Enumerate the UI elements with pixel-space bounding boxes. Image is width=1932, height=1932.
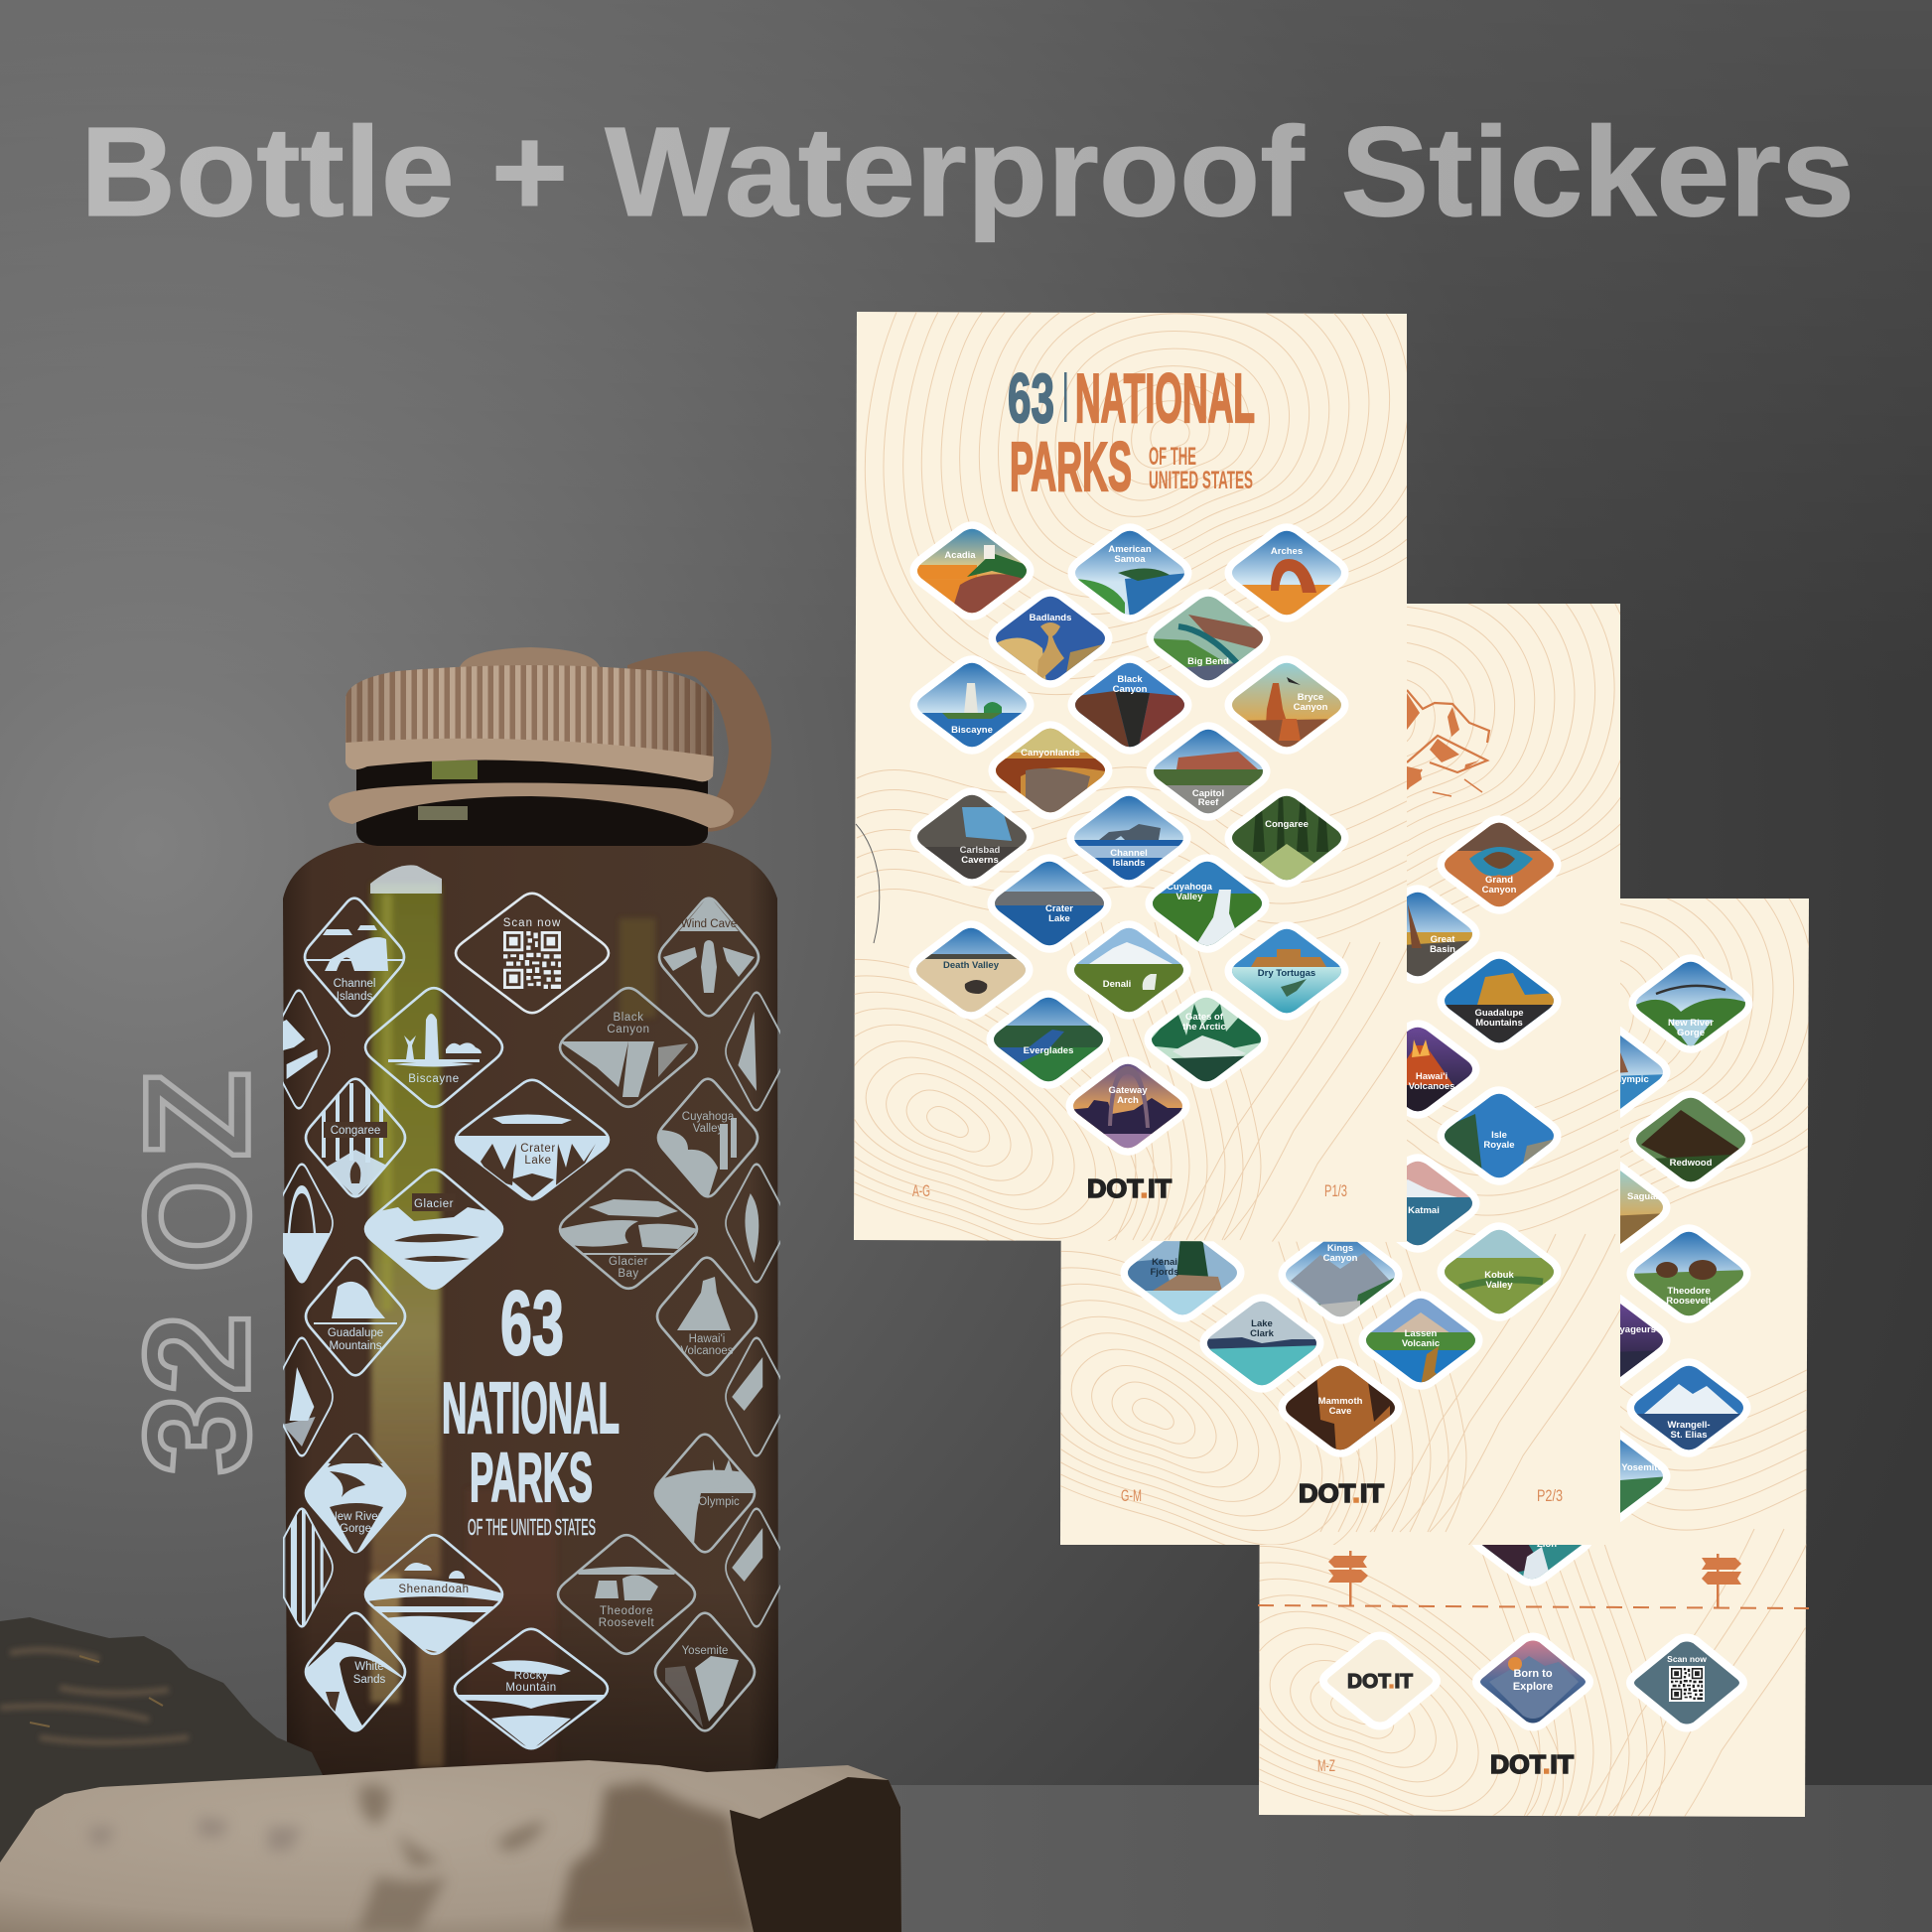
signpost left (1328, 1551, 1368, 1605)
sticker: Carlsbad Caverns (911, 791, 1033, 883)
sticker: Lassen Volcanic: Volcanic (1402, 1338, 1440, 1349)
sticker: Kenai Fjords (1122, 1227, 1243, 1318)
New River Gorge: New River (329, 1511, 382, 1523)
bottle: NATIONAL (442, 1369, 620, 1449)
Rocky Mountain: Rocky (514, 1670, 548, 1682)
sticker: DOT.IT logo: DOT.IT (1347, 1671, 1413, 1693)
Wind Cave: Wind Cave (681, 918, 737, 930)
Hot Springs partial (283, 1336, 334, 1457)
sticker: Badlands: Badlands (1030, 613, 1071, 623)
sheet title: 63 National Parks of the United States: UNITED STATES (1149, 467, 1253, 494)
White Sands (303, 1613, 408, 1733)
sticker: Hawai'i Volcanoes: Volcanoes (1409, 1081, 1454, 1092)
sticker: Scan now QR: Scan now (1667, 1654, 1707, 1664)
Theodore Roosevelt: Theodore (600, 1605, 653, 1617)
neck (356, 745, 708, 846)
sticker: Grand Canyon: Canyon (1482, 885, 1517, 896)
sticker: Hawai'i Volcanoes: Hawai'i (1416, 1071, 1448, 1082)
sticker: Gateway Arch: Arch (1117, 1095, 1139, 1106)
Crater Lake: Lake (524, 1155, 552, 1167)
sticker: Redwood: Redwood (1670, 1158, 1713, 1169)
sticker: Kings Canyon (1280, 1229, 1401, 1320)
sticker: Arches: Arches (1271, 546, 1303, 557)
bottle center text: 63 National Parks (442, 1273, 620, 1540)
Congaree (306, 1079, 405, 1197)
Channel Islands: Islands (337, 991, 372, 1003)
bottle body (283, 843, 778, 1779)
Olympic: Olympic (698, 1496, 740, 1508)
sticker: Isle Royale: Isle (1491, 1130, 1507, 1141)
bottle (268, 647, 787, 1781)
signpost right (1702, 1554, 1741, 1608)
sticker: Lassen Volcanic: Lassen (1405, 1328, 1438, 1339)
bottle center text: 63 National Parks: 63 (500, 1273, 564, 1374)
sticker: New River Gorge: New River (1668, 1018, 1714, 1029)
Biscayne: Biscayne (408, 1073, 460, 1085)
sheet title: 63 National Parks of the United States: NATIONAL (1075, 359, 1255, 437)
Cuyahoga Valley: Valley (693, 1123, 723, 1135)
sticker: Grand Canyon (1439, 819, 1560, 910)
sticker: Great Basin: Basin (1430, 944, 1455, 955)
sticker: Theodore Roosevelt: Roosevelt (1666, 1296, 1713, 1307)
Channel Islands (305, 898, 404, 1016)
sticker: Bryce Canyon (1226, 659, 1347, 751)
sticker: Mammoth Cave: Cave (1329, 1406, 1351, 1417)
sticker: Yosemite: Yosemite (1621, 1462, 1663, 1473)
sticker: Kenai Fjords: Kenai (1152, 1257, 1177, 1268)
mountain illustration (1407, 690, 1489, 796)
Crater Lake: Crater (520, 1143, 556, 1155)
label: P2/3: P2/3 (1537, 1486, 1563, 1505)
sticker: Congaree (1226, 792, 1347, 884)
sticker: Kenai Fjords: Fjords (1150, 1267, 1179, 1278)
sticker: Dry Tortugas: Dry Tortugas (1258, 968, 1315, 979)
bottle center text: 63 National Parks: OF THE UNITED STATES (468, 1514, 596, 1540)
rock: front (0, 1760, 901, 1932)
sticker: Mammoth Cave: Mammoth (1318, 1396, 1363, 1407)
Redwood partial (283, 1507, 334, 1628)
sticker: Channel Islands (1068, 792, 1189, 884)
sticker: Olympic (1620, 1027, 1670, 1118)
cap top knob (460, 647, 600, 667)
sticker: Arches (1226, 527, 1347, 619)
Guadalupe Mountains (306, 1258, 405, 1375)
sticker: Yosemite (1548, 1431, 1669, 1522)
sticker: Big Bend: Big Bend (1187, 656, 1229, 667)
sticker: Zion: Zion (1537, 1539, 1557, 1550)
sticker: New River Gorge (1630, 958, 1751, 1049)
White Sands: White (354, 1661, 384, 1673)
sticker: Acadia: Acadia (944, 550, 976, 561)
sticker: Guadalupe Mountains (1439, 955, 1560, 1046)
sticker: Wrangell-St. Elias: St. Elias (1671, 1430, 1707, 1441)
sticker: Everglades (988, 994, 1109, 1085)
glass reflection (370, 884, 655, 1767)
label: G-M: G-M (1121, 1486, 1142, 1505)
Theodore Roosevelt (558, 1535, 695, 1654)
sticker: Gates of the Arctic (1146, 994, 1267, 1085)
right edge partial diamonds (726, 993, 787, 1626)
sticker: Kobuk Valley: Kobuk (1484, 1270, 1514, 1281)
sticker: Gateway Arch (1067, 1060, 1188, 1152)
sticker: Capitol Reef: Reef (1198, 797, 1219, 808)
Big Bend partial (283, 989, 331, 1110)
sticker sheet 3: M-Z (1107, 744, 1892, 1932)
Crater Lake (449, 1080, 616, 1203)
sticker: Canyonlands (990, 725, 1111, 816)
sticker: Katmai (1357, 1158, 1478, 1249)
sticker: Scan now QR (1630, 1638, 1743, 1727)
Wind Cave (659, 896, 759, 1016)
sticker: Saguaro (1620, 1162, 1670, 1253)
Yosemite (655, 1613, 755, 1730)
sticker: Mammoth Cave (1280, 1362, 1401, 1453)
Shenandoah (361, 1535, 506, 1656)
Scan now QR diamond: Scan now (503, 917, 561, 929)
bottle strap loop (627, 651, 771, 832)
sticker: Black Canyon: Black (1117, 674, 1143, 685)
Biscayne (365, 988, 502, 1107)
Scan now QR diamond (456, 894, 609, 1013)
sticker: Gates of the Arctic: Gates of (1185, 1012, 1224, 1023)
thin map line (856, 824, 880, 943)
sticker: Channel Islands: Islands (1113, 858, 1145, 869)
Rocky Mountain: Mountain (505, 1682, 557, 1694)
right side diamonds (558, 896, 787, 1730)
New River Gorge: Gorge (340, 1523, 371, 1535)
sticker: Channel Islands: Channel (1110, 848, 1148, 859)
sticker: Capitol Reef: Capitol (1192, 788, 1224, 799)
Guadalupe Mountains: Mountains (329, 1340, 382, 1352)
sticker: Carlsbad Caverns: Caverns (961, 855, 999, 866)
sticker: Bryce Canyon: Bryce (1298, 692, 1323, 703)
sticker: Great Basin: Great (1431, 934, 1455, 945)
bottle diamond stickers (268, 894, 787, 1750)
sticker: Voyageurs (1548, 1295, 1669, 1386)
Black Canyon (559, 988, 697, 1107)
Cuyahoga Valley (655, 1079, 758, 1199)
sticker: Isle Royale (1439, 1090, 1560, 1181)
Theodore Roosevelt: Roosevelt (599, 1617, 654, 1629)
Hawaii Volcanoes (657, 1258, 757, 1375)
neck ring (329, 782, 734, 828)
sticker: Biscayne: Biscayne (951, 725, 993, 736)
sticker: DOT.IT logo (1323, 1636, 1437, 1725)
sticker: Biscayne (911, 659, 1033, 751)
sheet title: 63 National Parks of the United States: OF THE (1149, 443, 1196, 471)
sticker: Crater Lake (989, 858, 1110, 949)
sticker: Lassen Volcanic (1360, 1295, 1481, 1386)
sticker: Olympic: Olympic (1611, 1074, 1649, 1085)
sticker: Black Canyon: Canyon (1113, 684, 1148, 695)
Glacier Bay: Bay (618, 1268, 639, 1280)
sticker: Black Canyon (1069, 659, 1190, 751)
sticker: Saguaro: Saguaro (1627, 1191, 1665, 1202)
White Sands: Sands (353, 1674, 386, 1686)
Glacier Bay (559, 1170, 698, 1289)
Congaree: Congaree (331, 1125, 380, 1137)
sticker: Katmai: Katmai (1408, 1205, 1440, 1216)
left side diamonds (268, 898, 506, 1733)
sticker: Grand Canyon: Grand (1485, 875, 1513, 886)
sticker sheet 2: G-M (908, 449, 1694, 1640)
sticker: Hawai'i Volcanoes (1357, 1024, 1478, 1115)
sticker: Kobuk Valley: Valley (1486, 1280, 1513, 1291)
bottle center text: 63 National Parks: PARKS (470, 1439, 593, 1516)
sticker: Death Valley (910, 924, 1032, 1016)
sticker: Zion (1471, 1491, 1592, 1583)
sheet title: 63 National Parks of the United States: 63 (1008, 359, 1054, 437)
Black Canyon: Black (613, 1012, 644, 1024)
Gateway Arch partial (283, 1163, 334, 1284)
rock: dark back (0, 1617, 324, 1866)
brand: DOT.IT: DOT.IT (1087, 1173, 1172, 1203)
brand: DOT.IT: DOT.IT (1299, 1478, 1384, 1508)
sticker: Theodore Roosevelt (1628, 1228, 1749, 1319)
sticker: Big Bend (1148, 593, 1269, 684)
cap rim (345, 739, 714, 781)
sticker: Wrangell-St. Elias (1628, 1362, 1749, 1453)
sticker: Wrangell-St. Elias: Wrangell- (1667, 1420, 1711, 1431)
title: Bottle + Waterproof Stickers (80, 101, 1855, 243)
sticker: Guadalupe Mountains: Mountains (1475, 1018, 1523, 1029)
center diamonds (448, 894, 616, 1750)
Guadalupe Mountains: Guadalupe (328, 1327, 383, 1339)
sticker: Isle Royale: Royale (1483, 1140, 1515, 1151)
sticker: Lake Clark: Lake (1251, 1318, 1273, 1329)
sticker: New River Gorge: Gorge (1677, 1028, 1705, 1038)
sticker: Bryce Canyon: Canyon (1294, 702, 1328, 713)
sticker: Gateway Arch: Gateway (1108, 1085, 1148, 1096)
sticker: Voyageurs: Voyageurs (1608, 1324, 1656, 1335)
Yosemite: Yosemite (682, 1645, 728, 1657)
sticker: Everglades: Everglades (1024, 1045, 1073, 1056)
sticker: Badlands (990, 593, 1111, 684)
Glacier (364, 1170, 503, 1289)
sticker: Cuyahoga Valley (1147, 858, 1268, 949)
sticker: Denali: Denali (1103, 979, 1131, 990)
cap ribs (345, 665, 714, 766)
sticker: Cuyahoga Valley: Cuyahoga (1167, 882, 1213, 893)
sticker: American Samoa: Samoa (1114, 554, 1146, 565)
brand: DOT.IT: DOT.IT (1490, 1749, 1574, 1779)
sticker: Born to Explore: Explore (1513, 1681, 1553, 1693)
label: P1/3: P1/3 (1324, 1181, 1347, 1200)
Hawaii Volcanoes: Hawai'i (689, 1333, 725, 1345)
dashed cut line (1258, 1605, 1809, 1608)
sticker: Denali (1068, 924, 1189, 1016)
Shenandoah: Shenandoah (398, 1584, 470, 1595)
Black Canyon: Canyon (607, 1024, 650, 1035)
label: A-G: A-G (912, 1181, 930, 1200)
sheet title: 63 National Parks of the United States: PARKS (1010, 428, 1132, 505)
sticker: Capitol Reef (1148, 726, 1269, 817)
Hawaii Volcanoes: Volcanoes (680, 1345, 734, 1357)
sticker: Acadia (911, 525, 1033, 617)
sticker: Lake Clark: Clark (1250, 1328, 1275, 1339)
sticker: Carlsbad Caverns: Carlsbad (960, 845, 1001, 856)
sticker: Lake Clark (1201, 1298, 1322, 1389)
sticker: Congaree: Congaree (1265, 819, 1309, 830)
sticker: Born to Explore (1476, 1636, 1589, 1727)
sticker: Kings Canyon: Canyon (1323, 1253, 1358, 1264)
sticker: American Samoa (1069, 527, 1190, 619)
floor (874, 1785, 1932, 1932)
Glacier: Glacier (414, 1198, 454, 1210)
sticker: Theodore Roosevelt: Theodore (1667, 1286, 1711, 1297)
sticker: American Samoa: American (1108, 544, 1152, 555)
label: M-Z: M-Z (1317, 1756, 1335, 1775)
sticker: Great Basin (1357, 889, 1478, 980)
sticker: Born to Explore: Born to (1513, 1668, 1553, 1680)
sticker: Crater Lake: Lake (1048, 913, 1070, 924)
sticker: Death Valley: Death Valley (943, 960, 1000, 971)
sticker: Crater Lake: Crater (1045, 903, 1073, 914)
sticker: Guadalupe Mountains: Guadalupe (1474, 1008, 1524, 1019)
sticker: Dry Tortugas (1226, 925, 1347, 1017)
sticker: Redwood (1630, 1094, 1751, 1185)
sticker sheet 1: A-G (703, 157, 1489, 1348)
capacity label: 32 OZ: 32 OZ (113, 1070, 280, 1475)
sticker: Canyonlands: Canyonlands (1021, 748, 1080, 759)
sticker: Kings Canyon: Kings (1327, 1243, 1353, 1254)
sticker: Cuyahoga Valley: Valley (1176, 892, 1203, 902)
sheet title: 63 National Parks of the United States (1008, 359, 1255, 505)
Olympic (652, 1435, 758, 1555)
Rocky Mountain (448, 1629, 615, 1750)
Glacier Bay: Glacier (609, 1256, 648, 1268)
Channel Islands: Channel (334, 978, 375, 990)
New River Gorge (303, 1432, 408, 1555)
sticker: Gates of the Arctic: the Arctic (1182, 1022, 1226, 1033)
Cuyahoga Valley: Cuyahoga (682, 1111, 735, 1123)
sticker: Kobuk Valley (1439, 1226, 1560, 1317)
